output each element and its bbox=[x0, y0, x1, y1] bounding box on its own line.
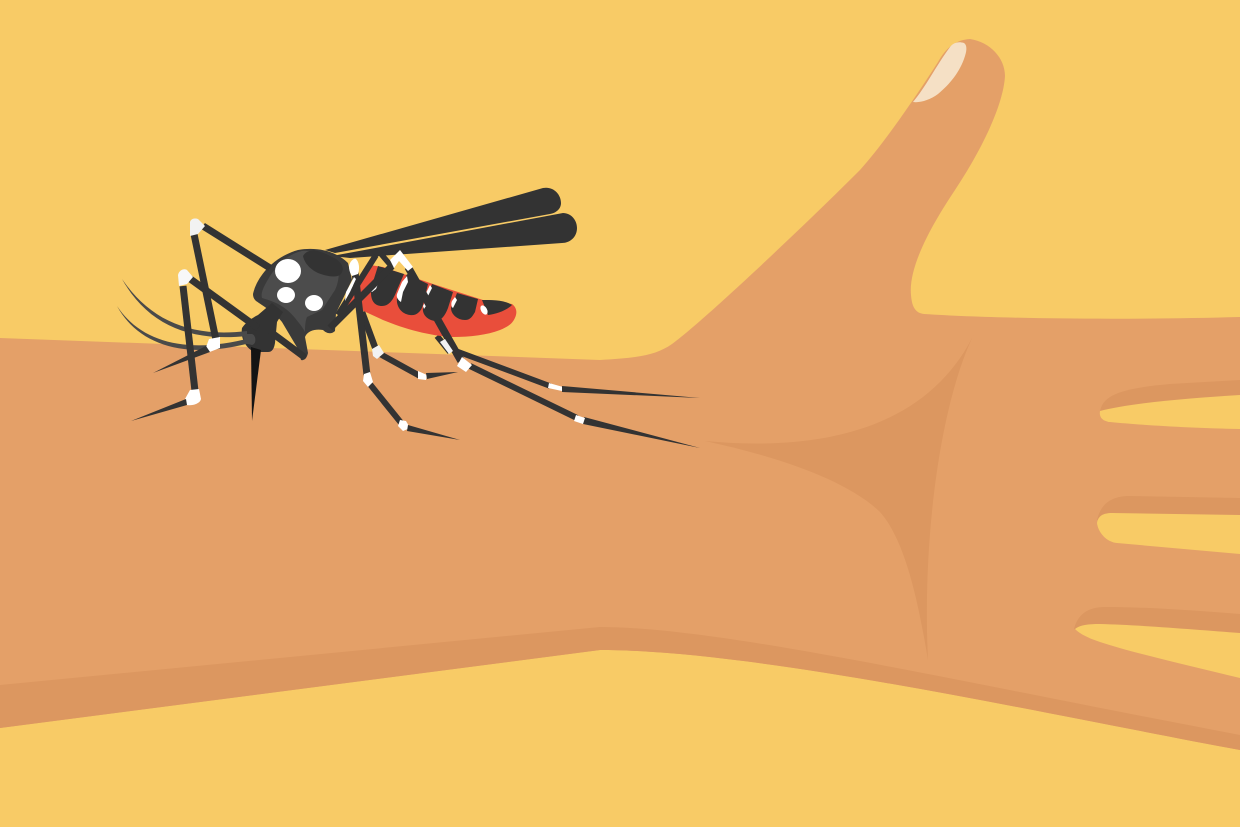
knee bbox=[349, 259, 359, 276]
front leg 2 bbox=[131, 269, 258, 421]
finger gap 2 bbox=[1097, 496, 1240, 554]
abdomen white markings bbox=[370, 276, 489, 316]
joint bbox=[363, 372, 373, 387]
head to thorax strut bbox=[272, 333, 303, 356]
proboscis bbox=[251, 347, 261, 421]
near leg bbox=[345, 259, 460, 440]
finger gap 1 bbox=[1100, 380, 1240, 429]
knee bbox=[390, 250, 413, 271]
abdomen bbox=[343, 265, 516, 337]
arm underside shadow bbox=[0, 627, 1240, 750]
hind leg joints bbox=[372, 339, 700, 398]
head bbox=[242, 303, 283, 352]
antennae bbox=[117, 279, 255, 350]
foot spike bbox=[131, 399, 187, 421]
joint bbox=[457, 357, 472, 372]
foot spike bbox=[153, 346, 210, 373]
hind leg upper segments bbox=[362, 312, 550, 386]
abdomen dark segments bbox=[371, 266, 512, 321]
joint white tips bbox=[190, 218, 205, 236]
palm crease bbox=[705, 330, 976, 660]
finger gap 3 bbox=[1074, 607, 1240, 678]
mosquito bbox=[117, 188, 700, 448]
middle leg bbox=[330, 250, 700, 448]
thorax bbox=[253, 249, 352, 360]
thorax white spots bbox=[275, 259, 323, 311]
thorax shell bbox=[253, 249, 352, 360]
foot spike bbox=[407, 425, 460, 440]
thorax dark patch bbox=[303, 250, 343, 276]
thumbnail bbox=[913, 42, 966, 102]
wings bbox=[325, 188, 577, 258]
foot spike bbox=[583, 417, 700, 448]
thorax highlight bbox=[262, 251, 339, 332]
joint white tips bbox=[178, 269, 193, 286]
front leg 1 bbox=[153, 218, 270, 373]
